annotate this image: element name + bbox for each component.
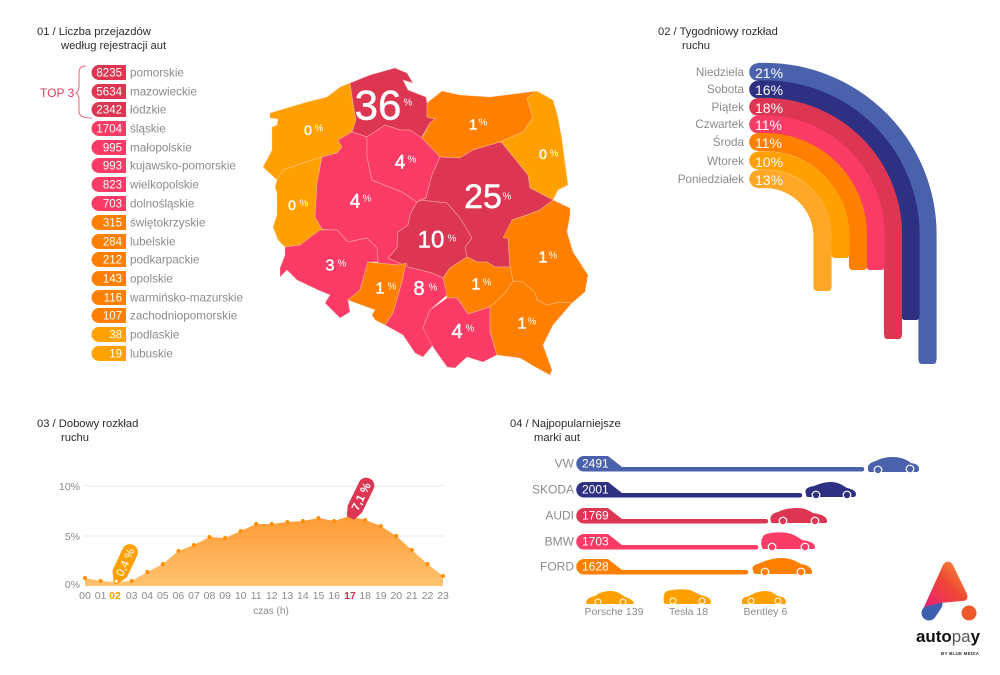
region: zachodniopomorskie — [263, 83, 356, 180]
map percentages: % — [338, 258, 347, 270]
weekly labels: Niedziela — [696, 66, 744, 79]
weekly labels: 11% — [755, 117, 782, 133]
weekly labels: 21% — [755, 65, 783, 81]
region: dolnośląskie — [280, 230, 378, 318]
heading: 01 — [37, 26, 167, 52]
map of Poland — [263, 68, 588, 375]
x axis labels: 04 — [141, 590, 153, 602]
weekly labels: Wtorek — [707, 155, 744, 168]
logo: autopay: autopay — [916, 627, 981, 646]
list: registrations by voivodeship: 107 — [103, 310, 122, 322]
map percentages: 0 — [539, 146, 547, 162]
list: registrations by voivodeship: podlaskie — [130, 328, 179, 342]
heading: 04: marki aut — [534, 432, 581, 444]
map percentages: 1 — [469, 116, 477, 134]
bar: FORD — [540, 558, 812, 576]
bar: SKODA — [532, 482, 856, 499]
axis title: czas (h) — [253, 606, 289, 617]
heading: 02 — [658, 26, 778, 52]
list: registrations by voivodeship: 212 — [103, 254, 122, 266]
map percentages: % — [483, 278, 492, 288]
list: registrations by voivodeship: 995 — [103, 142, 122, 154]
heading: 03: ruchu — [61, 432, 89, 444]
weekly labels: 10% — [755, 154, 783, 170]
bar: BMW — [545, 532, 815, 551]
map percentages: 1 — [472, 276, 481, 294]
y axis labels: 5% — [65, 531, 80, 543]
region: kujawsko-pomorskie — [367, 125, 440, 202]
brands bar chart — [532, 456, 919, 576]
bar: VW: VW — [555, 456, 575, 470]
list: registrations by voivodeship: świętokrzyskie — [130, 216, 205, 230]
list: registrations by voivodeship: 993 — [103, 160, 122, 172]
list: registrations by voivodeship: 143 — [103, 274, 122, 286]
x axis labels — [79, 590, 449, 602]
small cars row — [584, 589, 787, 618]
map percentages: % — [503, 192, 512, 202]
list: registrations by voivodeship: śląskie — [130, 122, 166, 136]
list: registrations by voivodeship: 38 — [109, 330, 122, 342]
heading: 02: ruchu — [682, 40, 710, 52]
heading: 03: 03 / Dobowy rozkład — [37, 418, 138, 430]
list: registrations by voivodeship: 703 — [103, 198, 122, 210]
list: registrations by voivodeship: lubuskie — [130, 348, 173, 360]
weekly labels: Czwartek — [695, 118, 744, 131]
data points — [83, 516, 445, 584]
weekly rainbow chart — [749, 63, 936, 364]
x axis labels: 15 — [313, 590, 324, 602]
list: registrations by voivodeship: 19 — [109, 348, 122, 360]
x axis labels: 05 — [157, 590, 169, 602]
map percentages: 0 — [304, 122, 312, 138]
map percentages: 1 — [518, 316, 527, 332]
bar: FORD: 1628 — [582, 560, 609, 574]
region: wielkopolskie — [315, 132, 417, 267]
x axis labels: 16 — [328, 590, 340, 602]
bar: AUDI: 1769 — [582, 508, 609, 522]
list: registrations by voivodeship: warmińsko-mazurskie — [129, 292, 243, 304]
arc: Niedziela — [749, 63, 936, 364]
y axis labels: 10% — [59, 481, 80, 493]
car: Porsche — [584, 591, 644, 618]
region: pomorskie — [350, 68, 435, 138]
weekly labels — [678, 65, 783, 188]
map percentages: % — [408, 154, 417, 166]
hourly area chart — [59, 481, 449, 617]
map percentages: 4 — [451, 321, 463, 343]
heading: 02: 02 / Tygodniowy rozkład — [658, 26, 778, 38]
arc: Poniedziałek — [749, 170, 831, 291]
x axis labels: 00 — [79, 590, 91, 602]
list: registrations by voivodeship: opolskie — [130, 272, 173, 286]
weekly labels: 11% — [755, 135, 782, 151]
car: Bentley — [742, 591, 787, 618]
heading: 01: według rejestracji aut — [60, 40, 167, 52]
x axis labels: 02 — [109, 590, 121, 602]
callout: 7,1 % — [343, 475, 377, 522]
map percentages: % — [429, 282, 438, 294]
map percentages: % — [315, 124, 324, 134]
x axis labels: 17 — [344, 590, 356, 602]
x axis labels: 01 — [95, 590, 107, 602]
x axis labels: 23 — [437, 590, 449, 602]
region: lubuskie — [273, 157, 330, 247]
map percentages: % — [549, 250, 558, 262]
map percentages: 0 — [288, 197, 296, 213]
list: registrations by voivodeship: 315 — [103, 218, 122, 230]
list: registrations by voivodeship: 284 — [103, 236, 123, 248]
TOP 3 bracket — [40, 66, 92, 118]
map percentages: % — [363, 194, 372, 204]
x axis labels: 14 — [297, 590, 309, 602]
TOP 3 bracket: TOP 3 — [40, 86, 75, 100]
map percentages: % — [528, 316, 537, 328]
x axis labels: 22 — [422, 590, 433, 602]
region: świętokrzyskie — [443, 257, 513, 314]
x axis labels: 21 — [406, 590, 418, 602]
arc: Czwartek — [749, 116, 884, 270]
map percentages: 10 — [418, 226, 444, 254]
bar: SKODA: 2001 — [582, 482, 609, 496]
list: registrations by voivodeship: 1704 — [96, 124, 123, 136]
x axis labels: 07 — [188, 590, 200, 602]
y axis labels — [59, 481, 80, 591]
callout: 0,4 % — [108, 542, 141, 586]
list: registrations by voivodeship: zachodniopomorskie — [130, 310, 237, 322]
list: registrations by voivodeship: kujawsko-pomorskie — [130, 160, 236, 172]
car: Porsche: Porsche 139 — [584, 606, 644, 618]
arc: Sobota — [749, 81, 919, 320]
callout: 0,4 %: 0,4 % — [114, 547, 138, 578]
heading: 03 — [37, 418, 138, 444]
weekly labels: 13% — [755, 172, 783, 188]
list: registrations by voivodeship: mazowieckie — [130, 86, 197, 98]
list: registrations by voivodeship: małopolskie — [130, 142, 192, 154]
map percentages: 25 — [464, 178, 502, 216]
list: registrations by voivodeship: 823 — [103, 180, 122, 192]
list: registrations by voivodeship: 2342 — [96, 104, 122, 116]
list: registrations by voivodeship: 116 — [104, 292, 122, 304]
heading: 01: 01 / Liczba przejazdów — [37, 26, 152, 38]
list: registrations by voivodeship: dolnośląskie — [130, 198, 194, 210]
region: podkarpackie — [490, 281, 572, 375]
bar: BMW: BMW — [545, 534, 575, 548]
x axis labels: 08 — [204, 590, 215, 602]
map percentages: % — [448, 234, 457, 244]
bar: SKODA: SKODA — [532, 482, 574, 496]
list: registrations by voivodeship: pomorskie — [130, 66, 184, 80]
x axis labels: 19 — [375, 590, 387, 602]
x axis labels: 11 — [251, 590, 262, 602]
region: śląskie — [385, 263, 447, 357]
map percentages: 1 — [539, 250, 548, 266]
logo: autopay: BY BLUE MEDIA — [941, 651, 980, 656]
region: warmińsko-mazurskie — [422, 91, 537, 158]
list: registrations by voivodeship: wielkopolskie — [129, 178, 199, 192]
heading: 04: 04 / Najpopularniejsze — [510, 418, 621, 430]
bar: VW — [555, 456, 919, 474]
map percentages: 36 — [355, 82, 401, 128]
car: Tesla: Tesla 18 — [669, 606, 708, 618]
arc: Środa — [749, 133, 867, 270]
weekly labels: 18% — [755, 100, 783, 116]
map percentages: % — [550, 148, 559, 160]
region: łódzkie — [388, 198, 472, 278]
map percentages: % — [388, 282, 397, 292]
list: registrations by voivodeship: 5634 — [96, 86, 123, 98]
x axis labels: 18 — [359, 590, 371, 602]
map percentages: % — [479, 118, 488, 128]
car: Bentley: Bentley 6 — [744, 606, 787, 618]
region: lubelskie — [503, 200, 588, 305]
region: małopolskie — [423, 298, 497, 368]
weekly labels: Środa — [713, 136, 744, 149]
x axis labels: 09 — [219, 590, 231, 602]
map percentages: % — [404, 98, 413, 108]
x axis labels: 03 — [126, 590, 138, 602]
arc: Wtorek — [749, 152, 849, 258]
map percentages: 8 — [413, 278, 425, 300]
map percentages: 4 — [395, 152, 406, 174]
heading: 04 — [510, 418, 621, 444]
callout: 7,1 %: 7,1 % — [350, 481, 374, 513]
bar: BMW: 1703 — [582, 534, 609, 548]
weekly labels: 16% — [755, 82, 783, 98]
weekly labels: Sobota — [707, 83, 744, 96]
bar: AUDI: AUDI — [545, 508, 574, 522]
bar: AUDI — [545, 508, 827, 525]
logo: autopay — [916, 562, 981, 656]
region: mazowieckie — [420, 142, 553, 267]
car: Tesla — [664, 589, 711, 618]
map percentages: 3 — [326, 258, 335, 274]
weekly labels: Piątek — [712, 101, 744, 114]
list: registrations by voivodeship: 8235 — [96, 68, 122, 80]
x axis labels: 12 — [266, 590, 278, 602]
map percentages — [288, 82, 559, 343]
map percentages: % — [300, 198, 309, 210]
list: registrations by voivodeship — [92, 65, 243, 361]
map percentages: 4 — [350, 192, 361, 212]
list: registrations by voivodeship: łódzkie — [130, 104, 166, 116]
arc: Piątek — [749, 98, 902, 339]
bar: FORD: FORD — [540, 560, 574, 574]
list: registrations by voivodeship: podkarpackie — [130, 254, 200, 266]
region: podlaskie — [500, 91, 568, 200]
map percentages: 1 — [376, 280, 385, 298]
y axis labels: 0% — [65, 579, 80, 591]
x axis labels: 20 — [390, 590, 402, 602]
x axis labels: 13 — [282, 590, 293, 602]
map percentages: % — [466, 324, 475, 334]
x axis labels: 06 — [173, 590, 184, 602]
bar: VW: 2491 — [582, 456, 609, 470]
x axis labels: 10 — [235, 590, 247, 602]
weekly labels: Poniedziałek — [678, 173, 744, 186]
region: opolskie — [348, 262, 406, 325]
list: registrations by voivodeship: lubelskie — [130, 236, 175, 248]
